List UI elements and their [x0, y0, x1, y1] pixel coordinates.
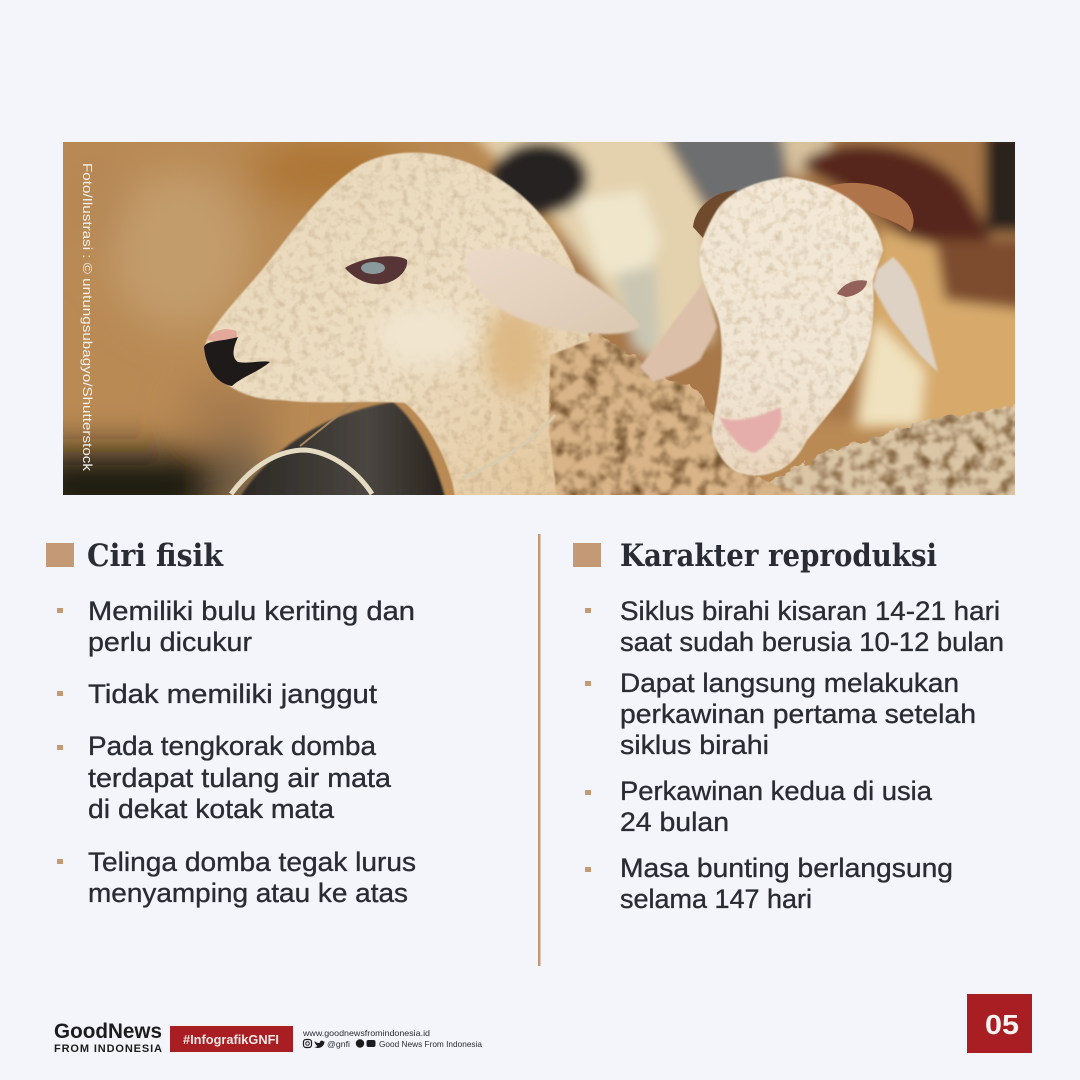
background sheep and wool [470, 130, 1030, 430]
right sheep left ear [640, 283, 717, 382]
footer [54, 994, 1032, 1055]
website and social handles: www.goodnewsfromindonesia.id [302, 1028, 430, 1038]
icon: instagram [304, 1040, 312, 1048]
right sheep right ear [873, 257, 938, 372]
left sheep nose [207, 329, 237, 343]
logo: GoodNews From Indonesia: FROM INDONESIA [54, 1043, 162, 1055]
right sheep head [700, 177, 883, 476]
fleece of left sheep [545, 335, 815, 500]
heading marker [46, 543, 74, 567]
right sheep eye [837, 280, 867, 297]
bullet item 3 [57, 731, 392, 824]
bullet item 4: menyamping atau ke atas [88, 878, 408, 908]
bullet item 3: 24 bulan [620, 807, 729, 837]
bullet item 1: Memiliki bulu keriting dan [88, 596, 415, 626]
photo: two sheep [63, 142, 1015, 495]
photo background [63, 142, 1015, 495]
website and social handles [302, 1028, 482, 1049]
bullet item 4: Masa bunting berlangsung [620, 853, 953, 883]
bullet item 2: Dapat langsung melakukan [620, 668, 959, 698]
page number: 05 [985, 1009, 1019, 1040]
neck rope [462, 415, 555, 478]
logo: GoodNews From Indonesia: GoodNews [54, 1020, 162, 1043]
bullet item 4: selama 147 hari [620, 884, 812, 914]
bullet item 1: saat sudah berusia 10-12 bulan [620, 627, 1004, 657]
bullet item 3: Perkawinan kedua di usia [620, 776, 933, 806]
bullet item 4 [57, 847, 416, 908]
page number [967, 994, 1032, 1053]
hashtag badge [170, 1026, 293, 1052]
bullet item 3: terdapat tulang air mata [88, 763, 392, 793]
website and social handles: @gnfi [327, 1039, 350, 1049]
heading: Karakter reproduksi: Karakter reproduksi [620, 538, 937, 574]
photo credit: Foto/Ilustrasi : © untungsubagyo/Shutterstock [80, 163, 95, 472]
panel: karakter reproduksi [573, 538, 1004, 914]
bullet item 3 [585, 776, 933, 837]
bullet item 1 [57, 596, 415, 657]
right sheep nose [720, 407, 781, 453]
icon: facebook [356, 1039, 364, 1048]
bullet item 2: perkawinan pertama setelah [620, 699, 976, 729]
logo: GoodNews From Indonesia [54, 1020, 162, 1055]
left sheep head and neck [204, 153, 590, 497]
pipe [240, 402, 445, 497]
bullet item 3: Pada tengkorak domba [88, 731, 377, 761]
website and social handles: Good News From Indonesia [379, 1039, 482, 1049]
bullet item 4 [585, 853, 953, 914]
bullet item 1 [585, 596, 1004, 657]
bullet item 2: Tidak memiliki janggut [88, 679, 378, 709]
rope on pipe [231, 450, 372, 494]
heading: Ciri fisik: Ciri fisik [87, 538, 224, 574]
hashtag badge: #InfografikGNFI [183, 1033, 279, 1047]
bullet item 1: perlu dicukur [88, 627, 252, 657]
bullet item 3: di dekat kotak mata [88, 794, 335, 824]
bullet item 4: Telinga domba tegak lurus [88, 847, 416, 877]
left sheep eye [345, 256, 407, 284]
fleece in front of right sheep [770, 404, 1015, 495]
left sheep ear [465, 248, 640, 334]
bullet item 1: Siklus birahi kisaran 14-21 hari [620, 596, 1000, 626]
icon: youtube [366, 1040, 376, 1047]
right sheep horns [693, 183, 914, 238]
bullet item 2: siklus birahi [620, 730, 769, 760]
heading marker [573, 543, 601, 567]
bullet item 2 [585, 668, 976, 760]
center divider [538, 534, 540, 966]
tan twine [300, 402, 355, 446]
icon: twitter [314, 1041, 324, 1048]
panel: ciri fisik [46, 538, 416, 908]
